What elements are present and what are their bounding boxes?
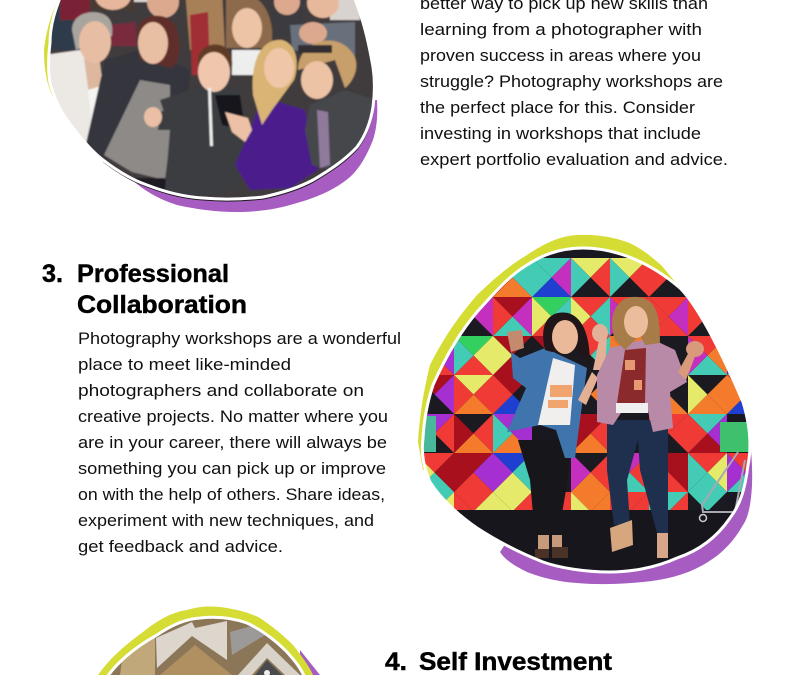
heading: 3. Professional Collaboration: Professional [77,260,229,288]
text block: section 3 body: something you can pick up or improve [78,459,386,478]
yellow backing shape [418,235,680,470]
woman with sunglasses in grey jacket [298,40,376,172]
text block: section 2 body: investing in workshops that include [420,124,701,143]
green shelf and cart [424,416,750,522]
blonde woman in purple [225,40,318,190]
text block: section 2 body: the perfect place for this. Consider [420,98,695,117]
woman in hoodie waving [144,44,248,197]
heading: 3. Professional Collaboration: Collaboration [77,291,247,319]
frames photo [110,618,302,675]
white outline [48,0,374,201]
text block: section 2 body: proven success in areas where you [420,46,701,65]
photo blob: group of workshop attendees [40,0,380,212]
yellow backing shape [98,606,313,675]
heading: 3. Professional Collaboration [42,260,247,319]
stage photo [424,250,748,570]
text block: section 2 body: learning from a photographer with [420,20,702,39]
text block: section 3 body: creative projects. No matter where you [78,407,388,426]
mosaic wall [424,258,748,510]
text block: section 3 body: place to meet like-minded [78,355,291,374]
text block: section 3 body: are in your career, there will always be [78,433,387,452]
text block: section 3 body [78,329,401,556]
yellow backing shape [44,0,75,97]
text block: section 2 body: expert portfolio evaluation and advice. [420,150,728,169]
text block: section 3 body: experiment with new techniques, and [78,511,374,530]
woman in dark jacket [85,16,190,200]
back row faces [92,0,355,75]
woman in lilac blazer [592,297,704,558]
woman in denim jacket [507,312,598,558]
white outline [422,248,750,572]
text block: section 3 body: on with the help of others. Share ideas, [78,485,385,504]
text block: section 2 body [420,0,728,169]
photo blob: picture frames [98,606,320,675]
purple backing shape [130,100,377,212]
text block: section 3 body: Photography workshops are a wonderful [78,329,401,348]
text block: section 3 body: get feedback and advice. [78,537,283,556]
group photo [40,0,380,205]
text block: section 2 body: struggle? Photography workshops are [420,72,723,91]
text block: section 3 body: photographers and collaborate on [78,381,364,400]
heading: 3. Professional Collaboration: 3. [42,260,63,288]
floor [456,510,709,531]
white outline [100,617,310,675]
purple backing shape [300,650,320,675]
photo blob: two women dancing before colourful wall [415,235,766,584]
purple backing shape [500,288,752,584]
woman in white cardigan [50,11,114,143]
